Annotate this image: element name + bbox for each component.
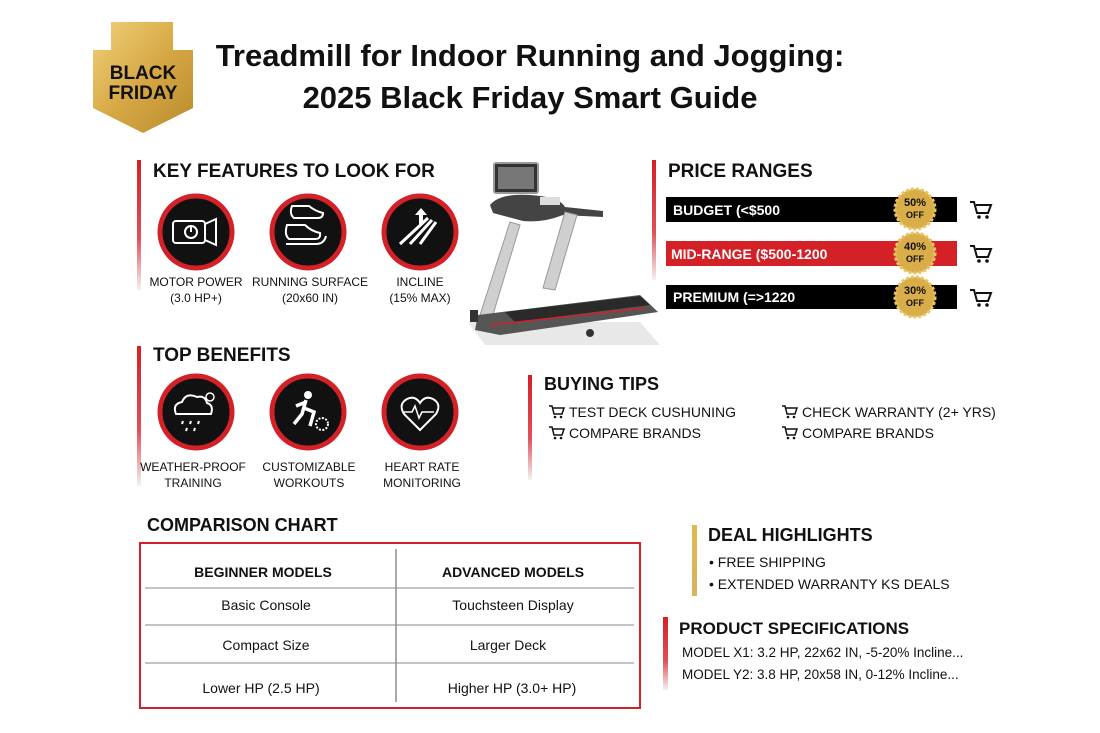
label: weather-proof: TRAINING [164,476,222,490]
tips list: COMPARE BRANDS [569,425,701,441]
table: BEGINNER MODELS [194,564,332,580]
heading: product specifications: PRODUCT SPECIFICATIONS [679,619,909,638]
label: motor power: MOTOR POWER [149,275,243,289]
specs text: MODEL X1: 3.2 HP, 22x62 IN, -5-20% Incline... [682,645,963,660]
title: Treadmill for Indoor Running and Jogging: [216,38,844,73]
label: running surface: (20x60 IN) [282,291,338,305]
heading: key features: KEY FEATURES TO LOOK FOR [153,161,435,182]
label: customizable: CUSTOMIZABLE [262,460,356,474]
table: Larger Deck [470,637,547,653]
panel: price ranges [652,160,991,317]
table: Basic Console [221,597,311,613]
bar: mid-range [666,233,991,273]
heading: comparison chart: COMPARISON CHART [147,515,338,535]
label: running surface: RUNNING SURFACE [252,275,368,289]
badge: black friday: FRIDAY [109,83,178,104]
heading: price ranges: PRICE RANGES [668,161,813,182]
heading: deal highlights: DEAL HIGHLIGHTS [708,525,873,545]
panel: top benefits [137,345,461,490]
bar: premium: OFF [906,298,924,308]
badge: black friday: BLACK [110,63,177,84]
table: Touchsteen Display [452,597,574,613]
tips list: CHECK WARRANTY (2+ YRS) [802,404,996,420]
label: customizable: WORKOUTS [274,476,344,490]
bar: budget: 50% [904,197,926,209]
panel: buying tips [528,374,996,480]
panel: deal highlights: • EXTENDED WARRANTY KS DEALS [709,576,950,592]
bar: premium: 30% [904,285,926,297]
title: 2025 Black Friday Smart Guide [303,80,757,115]
table: Lower HP (2.5 HP) [202,680,320,696]
panel: key features [137,160,456,305]
panel: product specifications: MODEL Y2: 3.8 HP, 20x58 IN, 0-12% Incline... [682,667,959,682]
label: heart rate: MONITORING [383,476,461,490]
label: incline: (15% MAX) [389,291,451,305]
icon: motor power [160,196,232,268]
panel: product specifications [663,617,963,690]
panel: comparison chart [140,515,640,708]
bar: premium [666,277,991,317]
title [216,38,844,115]
bar: mid-range: 40% [904,241,926,253]
bar: budget: BUDGET (<$500 [673,202,780,218]
bar: budget [666,189,991,229]
heading: top benefits: TOP BENEFITS [153,345,291,366]
table [140,543,640,708]
icon: incline [384,196,456,268]
label: incline: INCLINE [396,275,444,289]
icon: heart rate [384,376,456,448]
panel: deal highlights [692,525,950,596]
tips list: COMPARE BRANDS [802,425,934,441]
badge: black friday [93,22,193,133]
label: heart rate: HEART RATE [385,460,459,474]
tips list [549,404,996,441]
tips list: TEST DECK CUSHUNING [569,404,736,420]
image: treadmill [468,163,660,345]
table: Compact Size [222,637,310,653]
bar: premium: PREMIUM (=>1220 [673,289,795,305]
bar: mid-range: MID-RANGE ($500-1200 [671,246,828,262]
bar: mid-range: OFF [906,254,924,264]
label: motor power: (3.0 HP+) [170,291,222,305]
icon: running surface [272,196,344,268]
heading: buying tips: BUYING TIPS [544,374,659,394]
icon: weather [160,376,232,448]
label: weather-proof: WEATHER-PROOF [140,460,246,474]
list: deals: • FREE SHIPPING [709,554,826,570]
bar: budget: OFF [906,210,924,220]
table: ADVANCED MODELS [442,564,584,580]
icon: customizable [272,376,344,448]
table: Higher HP (3.0+ HP) [448,680,576,696]
